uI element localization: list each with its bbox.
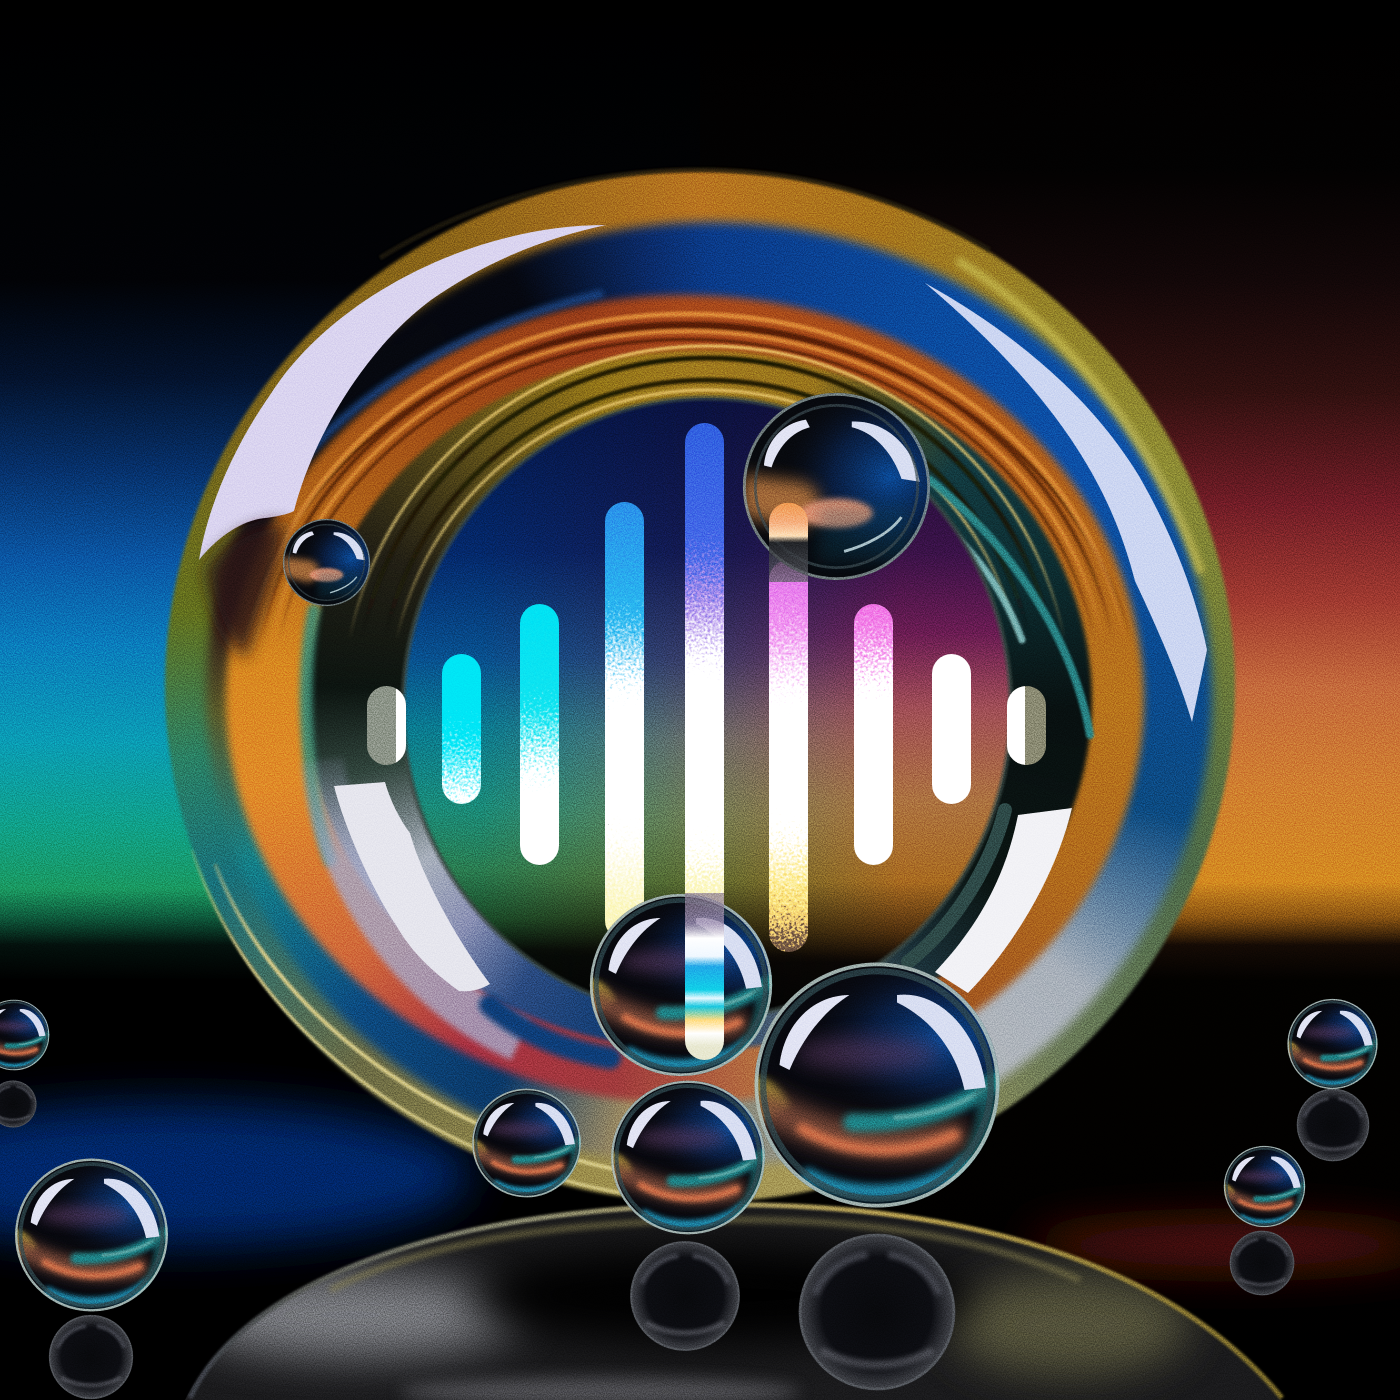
reflection: far right lower — [1230, 1231, 1294, 1295]
bubble: center above — [588, 892, 774, 1076]
reflection: far left bottom — [49, 1315, 133, 1399]
ring hole with refracted spectrum — [403, 398, 1011, 1018]
bar 7 — [854, 604, 893, 865]
bubble: far left bottom — [14, 1157, 170, 1311]
floor reflection of ring — [180, 1200, 1290, 1400]
bubble: small lower left — [471, 1088, 582, 1197]
blue edge of orange band — [270, 294, 600, 505]
floor reflection red — [1030, 1223, 1400, 1267]
bar 5 — [685, 423, 724, 904]
bar 4 — [605, 502, 644, 931]
reflection sheen group — [180, 1200, 1290, 1400]
bar 8 — [932, 654, 971, 804]
ring blue band — [206, 222, 1212, 1167]
bubble: left on ring — [282, 518, 371, 606]
bar 9 — [1007, 686, 1046, 765]
bar 2 — [442, 654, 481, 804]
highlight: lower left inner crescent — [334, 782, 490, 991]
shadow below upper left crescent — [206, 522, 284, 660]
lilac band lower left — [322, 760, 520, 1040]
hole rim — [403, 398, 1011, 1018]
ring orange band — [226, 295, 1144, 1103]
reflection rim — [190, 1205, 1282, 1398]
floor reflection blue — [0, 1105, 470, 1245]
gold lines on lower left rim — [192, 850, 640, 1196]
ring detail lines and highlights — [192, 170, 1207, 1196]
blue shade below hole — [490, 1005, 610, 1058]
reflection: large right — [799, 1234, 955, 1390]
reflection inner line — [330, 1220, 1080, 1290]
green edge line left — [306, 610, 330, 860]
reflection: lower center — [630, 1241, 740, 1351]
sound wave bars — [367, 370, 1046, 1110]
highlight: upper left crescent — [199, 225, 606, 560]
bubble reflections — [0, 1080, 1369, 1399]
bubble: top right of wave — [741, 391, 932, 580]
teal edge lines right — [930, 480, 1090, 735]
orange streak lines — [232, 314, 1140, 700]
bubble: far right lower — [1223, 1145, 1306, 1227]
gold band lines — [343, 346, 1071, 708]
bubble: lower center — [610, 1079, 766, 1234]
yellow streak on upper right rim — [960, 262, 1200, 570]
highlight: right crescent — [925, 283, 1207, 722]
dark line inside lower right crescent — [908, 810, 1005, 962]
highlight: lower right inner crescent — [935, 808, 1072, 993]
background left spectrum — [0, 0, 700, 1400]
bubbles — [0, 391, 1378, 1311]
bar 5 seen through bubble — [685, 893, 724, 1060]
bar 3 — [520, 604, 559, 865]
reflection: far left edge — [0, 1080, 37, 1128]
reflection: far right upper — [1297, 1089, 1369, 1161]
bubble: large right — [752, 960, 1002, 1208]
bar 6 seen through bubble — [769, 503, 808, 582]
bar 1 — [367, 686, 406, 765]
dark outer edge of ring — [380, 170, 990, 258]
background right spectrum — [700, 0, 1400, 1400]
bar 6 — [769, 562, 808, 952]
bubble: far right upper — [1286, 998, 1378, 1089]
ring inner band — [306, 350, 1092, 1050]
bubble: far left edge — [0, 999, 50, 1070]
ring outer rim band — [165, 170, 1235, 1202]
